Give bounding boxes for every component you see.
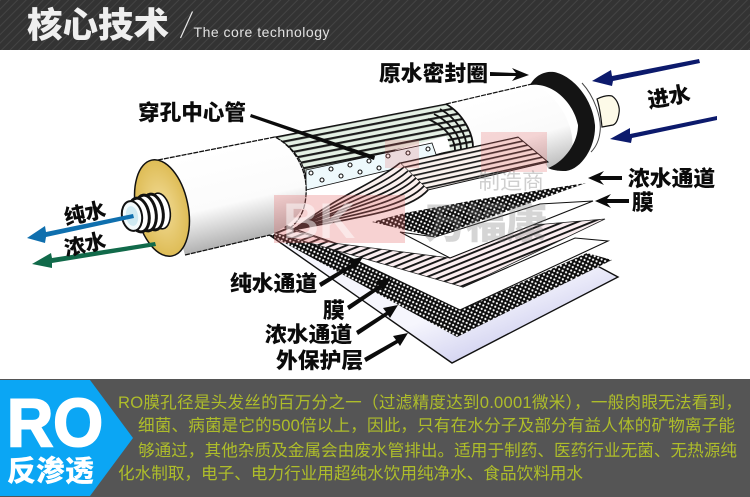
watermark: [274, 132, 547, 249]
description text: RO膜孔径是头发丝的百万分之一（过滤精度达到0.0001微米），一般肉眼无法看到，: [118, 393, 742, 412]
perforated centre tube: [306, 143, 438, 190]
title: 核心技术: [27, 6, 169, 46]
layer: permeate channel stripes: [272, 219, 605, 287]
seal ring outline: [582, 83, 600, 152]
label: lower membrane: 膜: [323, 298, 345, 323]
label: centre tube: 穿孔中心管: [138, 100, 246, 125]
curved flap fold: [292, 163, 428, 230]
black seal ring: [530, 72, 595, 171]
arrow: concentrate outlet: [32, 242, 156, 268]
badge RO: RO: [7, 385, 103, 461]
label: outer protective layer: 外保护层: [276, 348, 363, 373]
watermark: 制造商: [478, 169, 544, 194]
pointer: centre tube: [250, 114, 375, 160]
cylinder left section: [158, 137, 306, 255]
description text: 够通过，其他杂质及金属会由废水管排出。适用于制药、医药行业无菌、无热源纯: [138, 441, 737, 460]
pointer: feed seal: [490, 68, 529, 81]
layer: lower concentrate mesh: [272, 224, 612, 337]
arrow: inlet lower: [610, 116, 717, 143]
watermark: BK: [283, 193, 355, 249]
diagram: RO membrane element: [120, 72, 619, 363]
arrow: inlet upper: [592, 59, 700, 86]
label: inlet water: 进水: [646, 82, 693, 113]
description text: [118, 393, 742, 483]
pointer: upper membrane: [595, 194, 629, 208]
label: upper membrane: 膜: [632, 190, 654, 215]
label: feed seal: 原水密封圈: [379, 61, 488, 86]
cylinder outline: [158, 137, 306, 255]
label: lower concentrate channel: 浓水通道: [265, 322, 352, 347]
cylinder right top edge: [446, 84, 532, 104]
layer: upper membrane sheet: [400, 201, 593, 258]
unrolled stripe flap: [400, 137, 548, 190]
title slash: [180, 12, 192, 38]
RO badge: [0, 380, 133, 496]
cylinder right section: [446, 84, 573, 171]
watermark: 万福康: [425, 200, 547, 247]
pointer: outer layer: [364, 333, 408, 362]
header banner: [0, 0, 750, 50]
layer: outer protective layer: [268, 234, 618, 363]
layer: lower membrane sheet: [280, 224, 608, 310]
layer: upper concentrate mesh: [372, 183, 586, 237]
subtitle: The core technology: [194, 24, 330, 40]
wound end face: [126, 155, 198, 261]
pointer: lower concentrate channel: [356, 305, 398, 335]
label: pure water: 纯水: [62, 198, 108, 230]
bottom band: [0, 379, 750, 497]
pointer: upper concentrate channel: [588, 171, 622, 185]
description text: 化水制取，电子、电力行业用超纯水饮用纯净水、食品饮料用水: [118, 464, 583, 483]
label: permeate channel: 纯水通道: [230, 271, 317, 296]
opening behind tube: [395, 136, 450, 162]
wound layers, green tinted: [275, 104, 473, 180]
outlet tube: [120, 192, 173, 233]
end cap stub: [597, 96, 619, 127]
label: upper concentrate channel: 浓水通道: [628, 166, 715, 191]
badge caption: 反渗透: [7, 454, 94, 488]
label: concentrate: 浓水: [62, 230, 108, 261]
pointer: lower membrane: [347, 278, 391, 310]
tube perforations: [309, 147, 430, 182]
description text: 细菌、病菌是它的500倍以上，因此，只有在水分子及部分有益人体的矿物离子能: [138, 416, 735, 435]
curved wound ends: [428, 104, 473, 150]
arrow: pure water outlet: [27, 214, 134, 243]
pointer: permeate channel: [319, 257, 363, 287]
